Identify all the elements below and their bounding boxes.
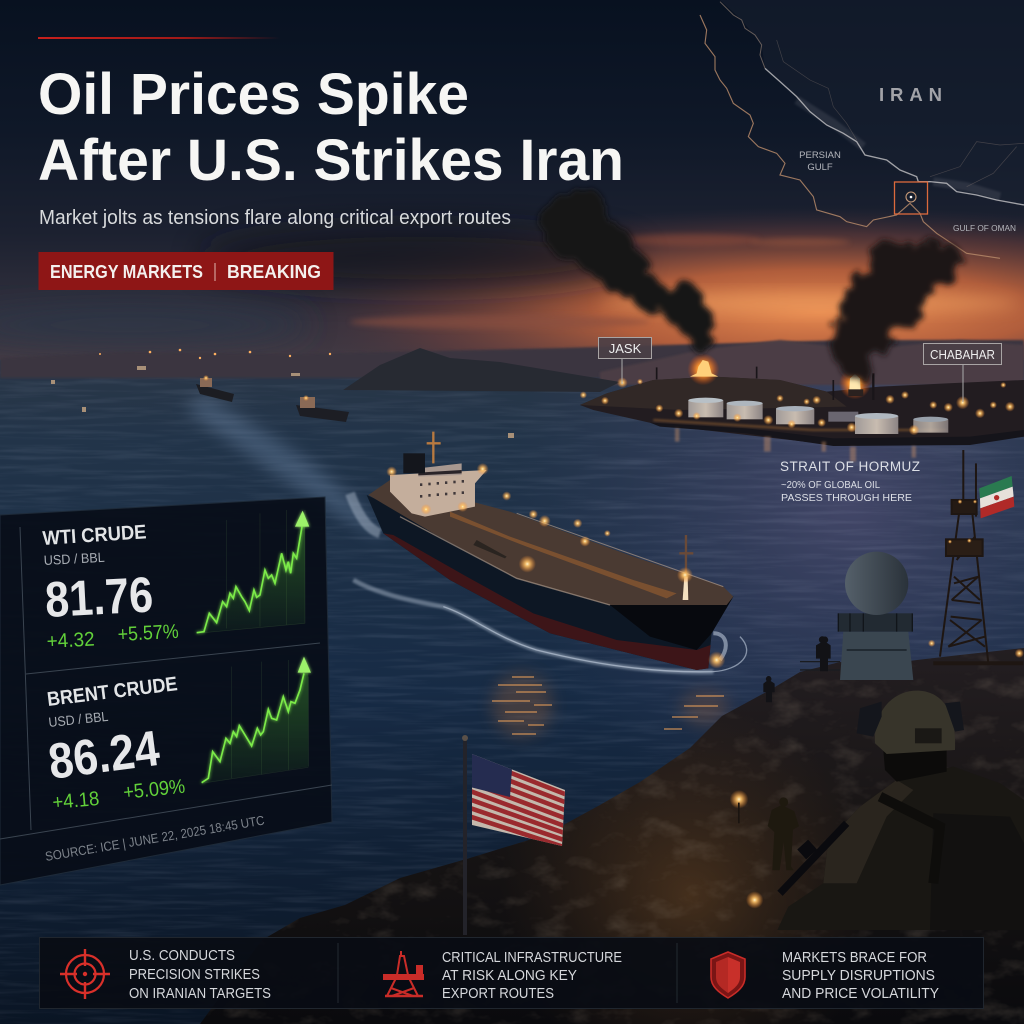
strait highlight box	[894, 182, 928, 214]
deck	[368, 480, 733, 605]
location label: Chabahar	[924, 344, 1002, 402]
Brent crude block: BRENT CRUDE	[46, 673, 179, 711]
water reflections	[675, 428, 916, 462]
superstructure	[390, 470, 487, 517]
foreground: rocky hillside	[200, 645, 1024, 1024]
item: precision strikes: ON IRANIAN TARGETS	[129, 986, 271, 1002]
fuel tanks	[688, 398, 948, 434]
item: infrastructure at risk: EXPORT ROUTES	[442, 986, 554, 1002]
item: infrastructure at risk: AT RISK ALONG KEY	[442, 968, 577, 984]
location label: Jask: JASK	[609, 341, 642, 356]
item: markets brace: SUPPLY DISRUPTIONS	[782, 968, 935, 984]
title: Oil Prices Spike	[38, 62, 469, 127]
WTI sparkline	[197, 510, 309, 633]
annotation: Strait of Hormuz: PASSES THROUGH HERE	[781, 492, 912, 504]
Brent crude block: +4.18	[52, 788, 100, 814]
Brent crude block	[45, 673, 186, 814]
map label: Persian Gulf: PERSIAN	[799, 150, 841, 161]
Brent crude block: USD / BBL	[48, 709, 109, 730]
map label: Iran: IRAN	[879, 84, 942, 105]
smoke plume: Chabahar	[828, 240, 962, 379]
title	[38, 62, 624, 193]
location label: Jask	[598, 338, 652, 384]
item: markets brace	[711, 950, 939, 1002]
map label: Gulf of Oman: GULF OF OMAN	[953, 223, 1016, 233]
iranian flag	[979, 476, 1014, 518]
sentry silhouettes	[763, 636, 831, 702]
hull	[367, 495, 733, 670]
annotation: Strait of Hormuz: STRAIT OF HORMUZ	[780, 459, 920, 474]
radar station and tower	[730, 450, 1024, 930]
smoke plume: Jask	[538, 188, 714, 353]
item: markets brace: MARKETS BRACE FOR	[782, 950, 927, 966]
headland island	[343, 348, 620, 392]
coastline: Iran	[720, 2, 1024, 205]
distant horizon hills and lights	[0, 340, 1024, 385]
ship lights	[386, 463, 725, 669]
coastline: Arabia	[700, 15, 1000, 258]
item: precision strikes: PRECISION STRIKES	[129, 967, 260, 983]
item: precision strikes: U.S. CONDUCTS	[129, 948, 235, 964]
WTI crude block: USD / BBL	[43, 550, 106, 568]
terminal lights	[580, 377, 1015, 435]
WTI crude block: +4.32	[46, 629, 95, 653]
title: After U.S. Strikes Iran	[38, 128, 624, 193]
icon: crosshair	[60, 949, 110, 999]
ship wake	[350, 493, 747, 672]
superstructure windows	[420, 480, 464, 498]
map overlay: Iran and Gulf	[700, 0, 1024, 258]
item: markets brace: AND PRICE VOLATILITY	[782, 986, 939, 1002]
top accent line	[38, 37, 280, 39]
badge: energy markets: ENERGY MARKETS	[50, 262, 203, 282]
tower lights	[928, 499, 1024, 658]
icon: oil rig	[384, 951, 423, 996]
background: dusk sky	[0, 0, 1024, 375]
data panel: crude prices	[0, 497, 332, 885]
badge: energy markets	[38, 252, 334, 290]
path lamps	[730, 790, 763, 909]
item: infrastructure at risk	[384, 950, 622, 1002]
ship reflection on water	[492, 673, 729, 737]
icon: shield	[711, 952, 745, 998]
flag: United States	[462, 735, 570, 935]
WTI crude block: 81.76	[44, 566, 154, 628]
comms tower	[933, 450, 1023, 663]
oil tanker	[350, 432, 747, 672]
item: infrastructure at risk: CRITICAL INFRASTRUCTURE	[442, 950, 622, 966]
map label: Persian Gulf: GULF	[807, 162, 833, 173]
Brent sparkline	[202, 657, 311, 783]
WTI crude block: +5.57%	[117, 621, 179, 646]
WTI crude block	[42, 521, 179, 653]
subtitle: Market jolts as tensions flare along critical export routes	[39, 207, 511, 229]
Brent crude block: +5.09%	[122, 776, 186, 804]
WTI crude block: WTI CRUDE	[42, 521, 147, 550]
data source note: SOURCE: ICE | JUNE 22, 2025 18:45 UTC	[44, 813, 265, 864]
bottom summary bar	[40, 938, 984, 1008]
sea	[0, 360, 1024, 1024]
radar dome	[800, 552, 913, 680]
annotation: Strait of Hormuz	[780, 459, 920, 504]
annotation: Strait of Hormuz: ~20% OF GLOBAL OIL	[781, 480, 880, 491]
badge: energy markets: BREAKING	[227, 262, 321, 282]
refinery fires	[657, 353, 873, 400]
location label: Chabahar: CHABAHAR	[930, 348, 995, 362]
Brent crude block: 86.24	[45, 720, 163, 790]
item: precision strikes	[60, 948, 271, 1002]
patrol soldier	[768, 797, 799, 870]
distant tanker ships	[51, 366, 514, 438]
terminal: land, tanks, fires	[580, 353, 1024, 462]
main soldier	[777, 691, 1024, 930]
